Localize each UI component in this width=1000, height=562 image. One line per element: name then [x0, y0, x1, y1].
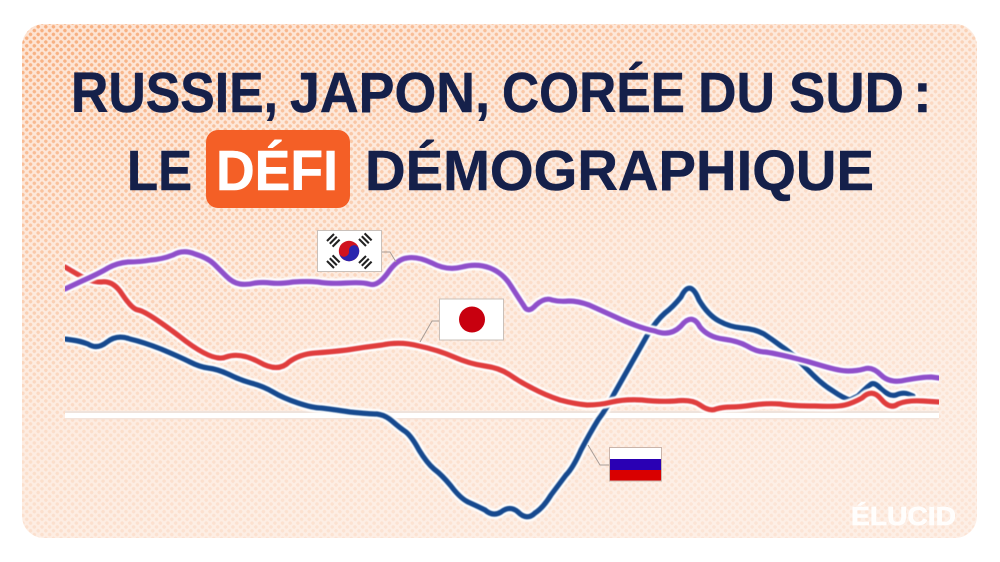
title line 1: SUD	[789, 61, 904, 124]
title line 2: LE	[127, 139, 192, 202]
title line 2	[127, 139, 874, 202]
title	[71, 61, 932, 208]
logo: Élucid: ÉLUCID	[851, 501, 956, 531]
callout: South Korea flag	[318, 230, 396, 272]
title line 1	[71, 61, 932, 124]
callout: Japan flag	[420, 299, 504, 342]
chart: demographic curves	[65, 252, 939, 517]
curve: Russia	[65, 288, 913, 517]
title line 2: DÉMOGRAPHIQUE	[365, 139, 874, 202]
highlighted word DÉFI: DÉFI	[216, 139, 338, 202]
curve: South Korea	[65, 252, 939, 381]
title line 1: :	[913, 61, 932, 124]
chart baseline	[65, 411, 939, 420]
title line 1: CORÉE	[502, 61, 685, 124]
title line 1: JAPON,	[290, 61, 490, 124]
curve: Japan	[65, 267, 939, 410]
callout: Russia flag	[588, 445, 662, 481]
title line 1: RUSSIE,	[71, 61, 278, 124]
title line 1: DU	[698, 61, 775, 124]
